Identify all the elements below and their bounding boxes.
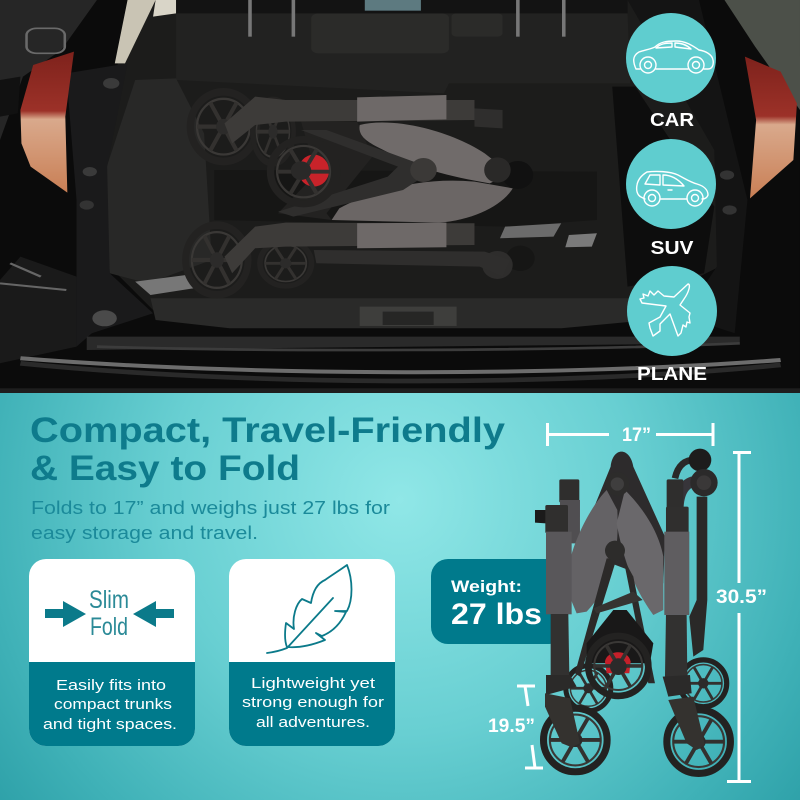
card caption: all adventures. [256,714,370,731]
icon: car [634,41,713,73]
title: Compact, Travel-Friendly [30,411,506,450]
weight callout: 27 lbs [451,598,542,631]
weight callout: Weight: [451,577,522,596]
dimension: 19.5 inch wheel height [488,686,543,768]
card caption: strong enough for [242,694,384,711]
card caption: compact trunks [54,696,172,713]
panel: lightweight card [229,559,395,746]
stroller frame and fabric [535,449,718,697]
label: PLANE: PLANE [637,364,707,384]
lower teal panel [0,393,800,800]
dimension: 30.5 inch height: 30.5” [716,587,767,608]
card caption: Easily fits into [56,677,166,694]
label: SUV: SUV [650,238,694,258]
description text [31,498,390,543]
label: CAR: CAR [650,110,694,130]
title [30,411,506,488]
icon: slim fold arrows [45,586,174,641]
description text: Folds to 17” and weighs just 27 lbs for [31,498,390,518]
transport badge: car [626,13,716,130]
transport badge: plane [627,266,717,384]
dimension: 19.5 inch wheel height: 19.5” [488,716,535,737]
card caption: and tight spaces. [43,716,177,733]
open car door, left [0,0,97,140]
icon: slim fold arrows: Slim [89,586,129,614]
transport badge: SUV [626,139,716,258]
description text: easy storage and travel. [31,523,258,543]
card caption [242,675,384,731]
folded stroller in trunk [186,92,535,295]
icon: plane [640,284,690,336]
title: & Easy to Fold [30,449,300,488]
weight callout [431,559,566,644]
front center wheel with red hub [588,636,648,696]
rear wheels [566,660,727,711]
icon: SUV [637,171,708,206]
panel: slim fold card [29,559,195,746]
folded stroller product image [535,449,730,773]
tail light, right [745,57,797,198]
dimension: 17 inch width: 17” [622,425,651,446]
trunk interior [102,0,730,310]
icon: feather [267,565,352,653]
tail light, left [20,52,74,193]
icon: slim fold arrows: Fold [90,613,128,641]
card caption: Lightweight yet [251,675,376,692]
product photo: stroller folded in SUV trunk [0,0,800,393]
card caption [43,677,177,733]
front wheels and forks [544,693,730,773]
background foliage, right [724,0,800,110]
trunk sill and latch [151,298,633,328]
car body pillars and bumper [0,0,800,393]
